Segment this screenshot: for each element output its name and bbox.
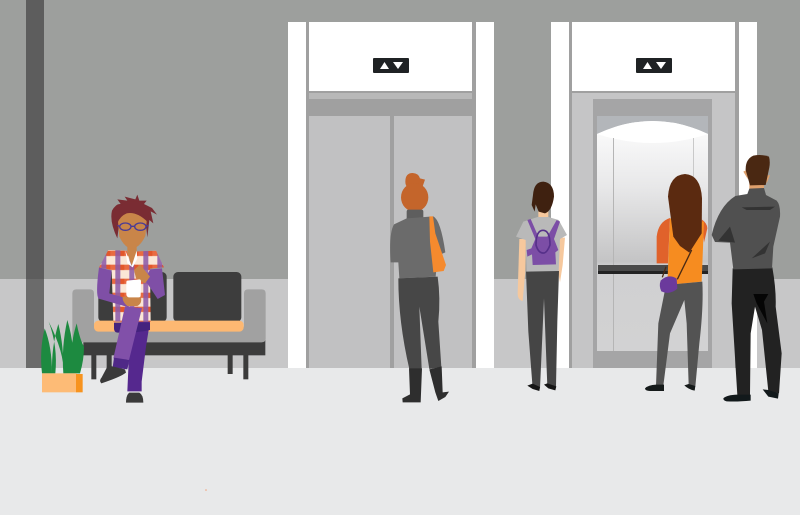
woman with long hair and orange top [645,174,707,391]
transom band [309,93,472,99]
man sitting on sofa with phone [97,195,165,403]
sweater [390,216,445,278]
front leg cuff [113,358,129,369]
cabin handrail [598,265,708,274]
trouser fold [753,294,768,323]
cabin frame [593,99,712,368]
purple bag [660,276,677,293]
hair [401,183,428,212]
sofa arms and seat [72,289,266,342]
cabin ceiling [597,116,708,134]
lower shoe [126,393,143,403]
shirt [99,250,164,322]
right sleeve [145,268,165,299]
trousers [732,267,782,395]
bag strap [662,250,692,279]
raised hand [134,265,150,283]
small orange speck [205,489,207,491]
left elevator [288,22,494,368]
shirt fold [718,207,775,258]
hair [532,182,554,213]
bun [405,173,425,191]
neck [749,180,764,190]
glasses [117,223,149,230]
left door [309,116,390,368]
shirt [712,188,780,269]
shoes [645,384,695,391]
hair [746,155,770,185]
plant pot [42,373,77,392]
left backrest [98,272,167,322]
man in dark shirt with folded arms [712,155,782,402]
elevator inner surround [306,22,476,368]
right backrest [173,272,241,322]
dark wall column [26,0,44,368]
floor indicator sign [373,58,409,73]
hair fringe [115,202,149,223]
elevator frame [551,22,757,368]
right boot [429,366,449,401]
back leg [127,322,150,391]
neck [538,210,548,219]
woman with purple backpack [516,182,567,391]
pot side [76,374,83,392]
front leg [113,307,142,360]
front shoe [100,365,126,383]
shoulder bag [429,216,446,272]
neck [127,243,137,265]
wall background [0,0,800,368]
elevator side panels [572,93,735,368]
right door [394,116,472,368]
shoes [527,383,556,391]
hair [668,174,702,253]
ceiling light [597,121,708,143]
hair back [111,195,157,238]
trousers [398,277,441,369]
shirt collar [125,251,137,267]
hips [114,323,150,333]
elevator inner surround [569,22,739,368]
woman with orange bag and hair bun [390,173,449,402]
ears [743,170,770,183]
sofa base [83,339,265,355]
trousers [526,271,559,388]
right sleeve [702,219,707,243]
sofa [72,272,266,379]
left arm [518,239,526,301]
left sleeve [97,267,130,307]
cabin interior [597,116,708,351]
floor [0,368,800,515]
backpack [527,219,560,265]
lower hand [123,297,141,306]
trousers [656,282,703,387]
shoes [723,389,779,402]
floor indicator sign [636,58,672,73]
elevator frame [288,22,494,368]
elevator header panel [309,22,472,91]
sofa legs [91,353,248,379]
right arm [558,238,565,282]
potted plant [41,320,84,392]
seat cushion [94,321,244,332]
right elevator, open [551,22,757,368]
turtleneck [407,210,423,221]
cabin wall lines [613,138,694,351]
left sleeve [657,218,670,263]
phone [126,279,141,297]
elevator header panel [572,22,735,91]
top [667,218,704,285]
t-shirt [516,217,567,272]
left boot [402,368,422,402]
face [118,212,147,248]
plant leaves [41,320,84,373]
